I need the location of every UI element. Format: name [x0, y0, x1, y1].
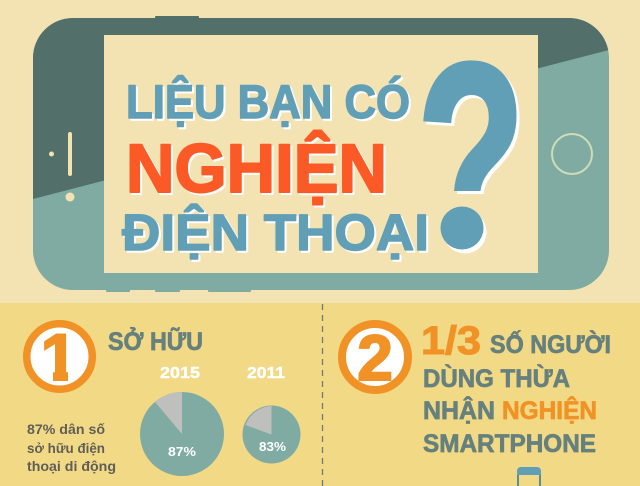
ownership description: [27, 422, 116, 474]
bottom panel background: [0, 303, 640, 486]
phone screen: [104, 35, 538, 273]
phone bottom buttons: [106, 288, 251, 292]
phone side buttons: [155, 16, 199, 20]
phone speaker: [68, 132, 72, 176]
title line 1: LIỆU BẠN CÓ: [126, 75, 410, 128]
question mark shadow: ?: [420, 11, 528, 311]
heading line 2: DÙNG THỪA: [423, 363, 570, 393]
title line 3: ĐIỆN THOẠI: [124, 205, 431, 263]
header background: [0, 0, 640, 303]
phone body: [33, 18, 609, 290]
big question mark: [423, 60, 520, 254]
ownership description: sở hữu điện: [27, 441, 105, 456]
dashed divider: [322, 304, 324, 486]
ownership description: 87% dân số: [27, 422, 105, 437]
number badge 2: 2: [357, 322, 393, 394]
heading line 4: SMARTPHONE: [423, 430, 596, 458]
title: [122, 75, 431, 263]
question mark dot: [440, 206, 484, 250]
phone illustration: [33, 16, 609, 292]
heading line 1: SỐ NGƯỜI: [490, 329, 611, 359]
pie chart 2011: 83%: [259, 439, 286, 454]
number badge 1: 1: [41, 320, 77, 394]
year label 2015: 2015: [160, 365, 200, 382]
title line 2: NGHIỆN: [128, 132, 389, 209]
panel: section 2 addiction: [342, 319, 611, 486]
title line 3: ĐIỆN THOẠI: [122, 203, 429, 261]
pie chart 2015: [140, 392, 224, 476]
number badge 1: [27, 320, 92, 394]
pie chart 2015: 87%: [168, 444, 196, 459]
pie chart 2011: [242, 406, 300, 464]
heading: so huu: SỞ HỮU: [108, 326, 203, 356]
icon: smartphone: [517, 467, 541, 486]
fraction 1/3: 1/3: [421, 319, 481, 363]
phone sensor dot: [49, 152, 54, 156]
phone camera dot: [66, 192, 74, 202]
question mark stem: ?: [417, 8, 525, 308]
question mark dot shadow: [444, 210, 486, 254]
panel: section 1 ownership: [27, 320, 300, 476]
heading line 3: NHẬN: [423, 395, 495, 425]
title line 2: NGHIỆN: [126, 130, 387, 207]
highlighted word: NGHIỆN: [502, 395, 597, 425]
phone home button: [552, 134, 592, 174]
title line 1: LIỆU BẠN CÓ: [128, 77, 412, 130]
year label 2011: 2011: [247, 365, 285, 382]
number badge 2: [342, 322, 408, 394]
ownership description: thoại di động: [27, 459, 116, 474]
